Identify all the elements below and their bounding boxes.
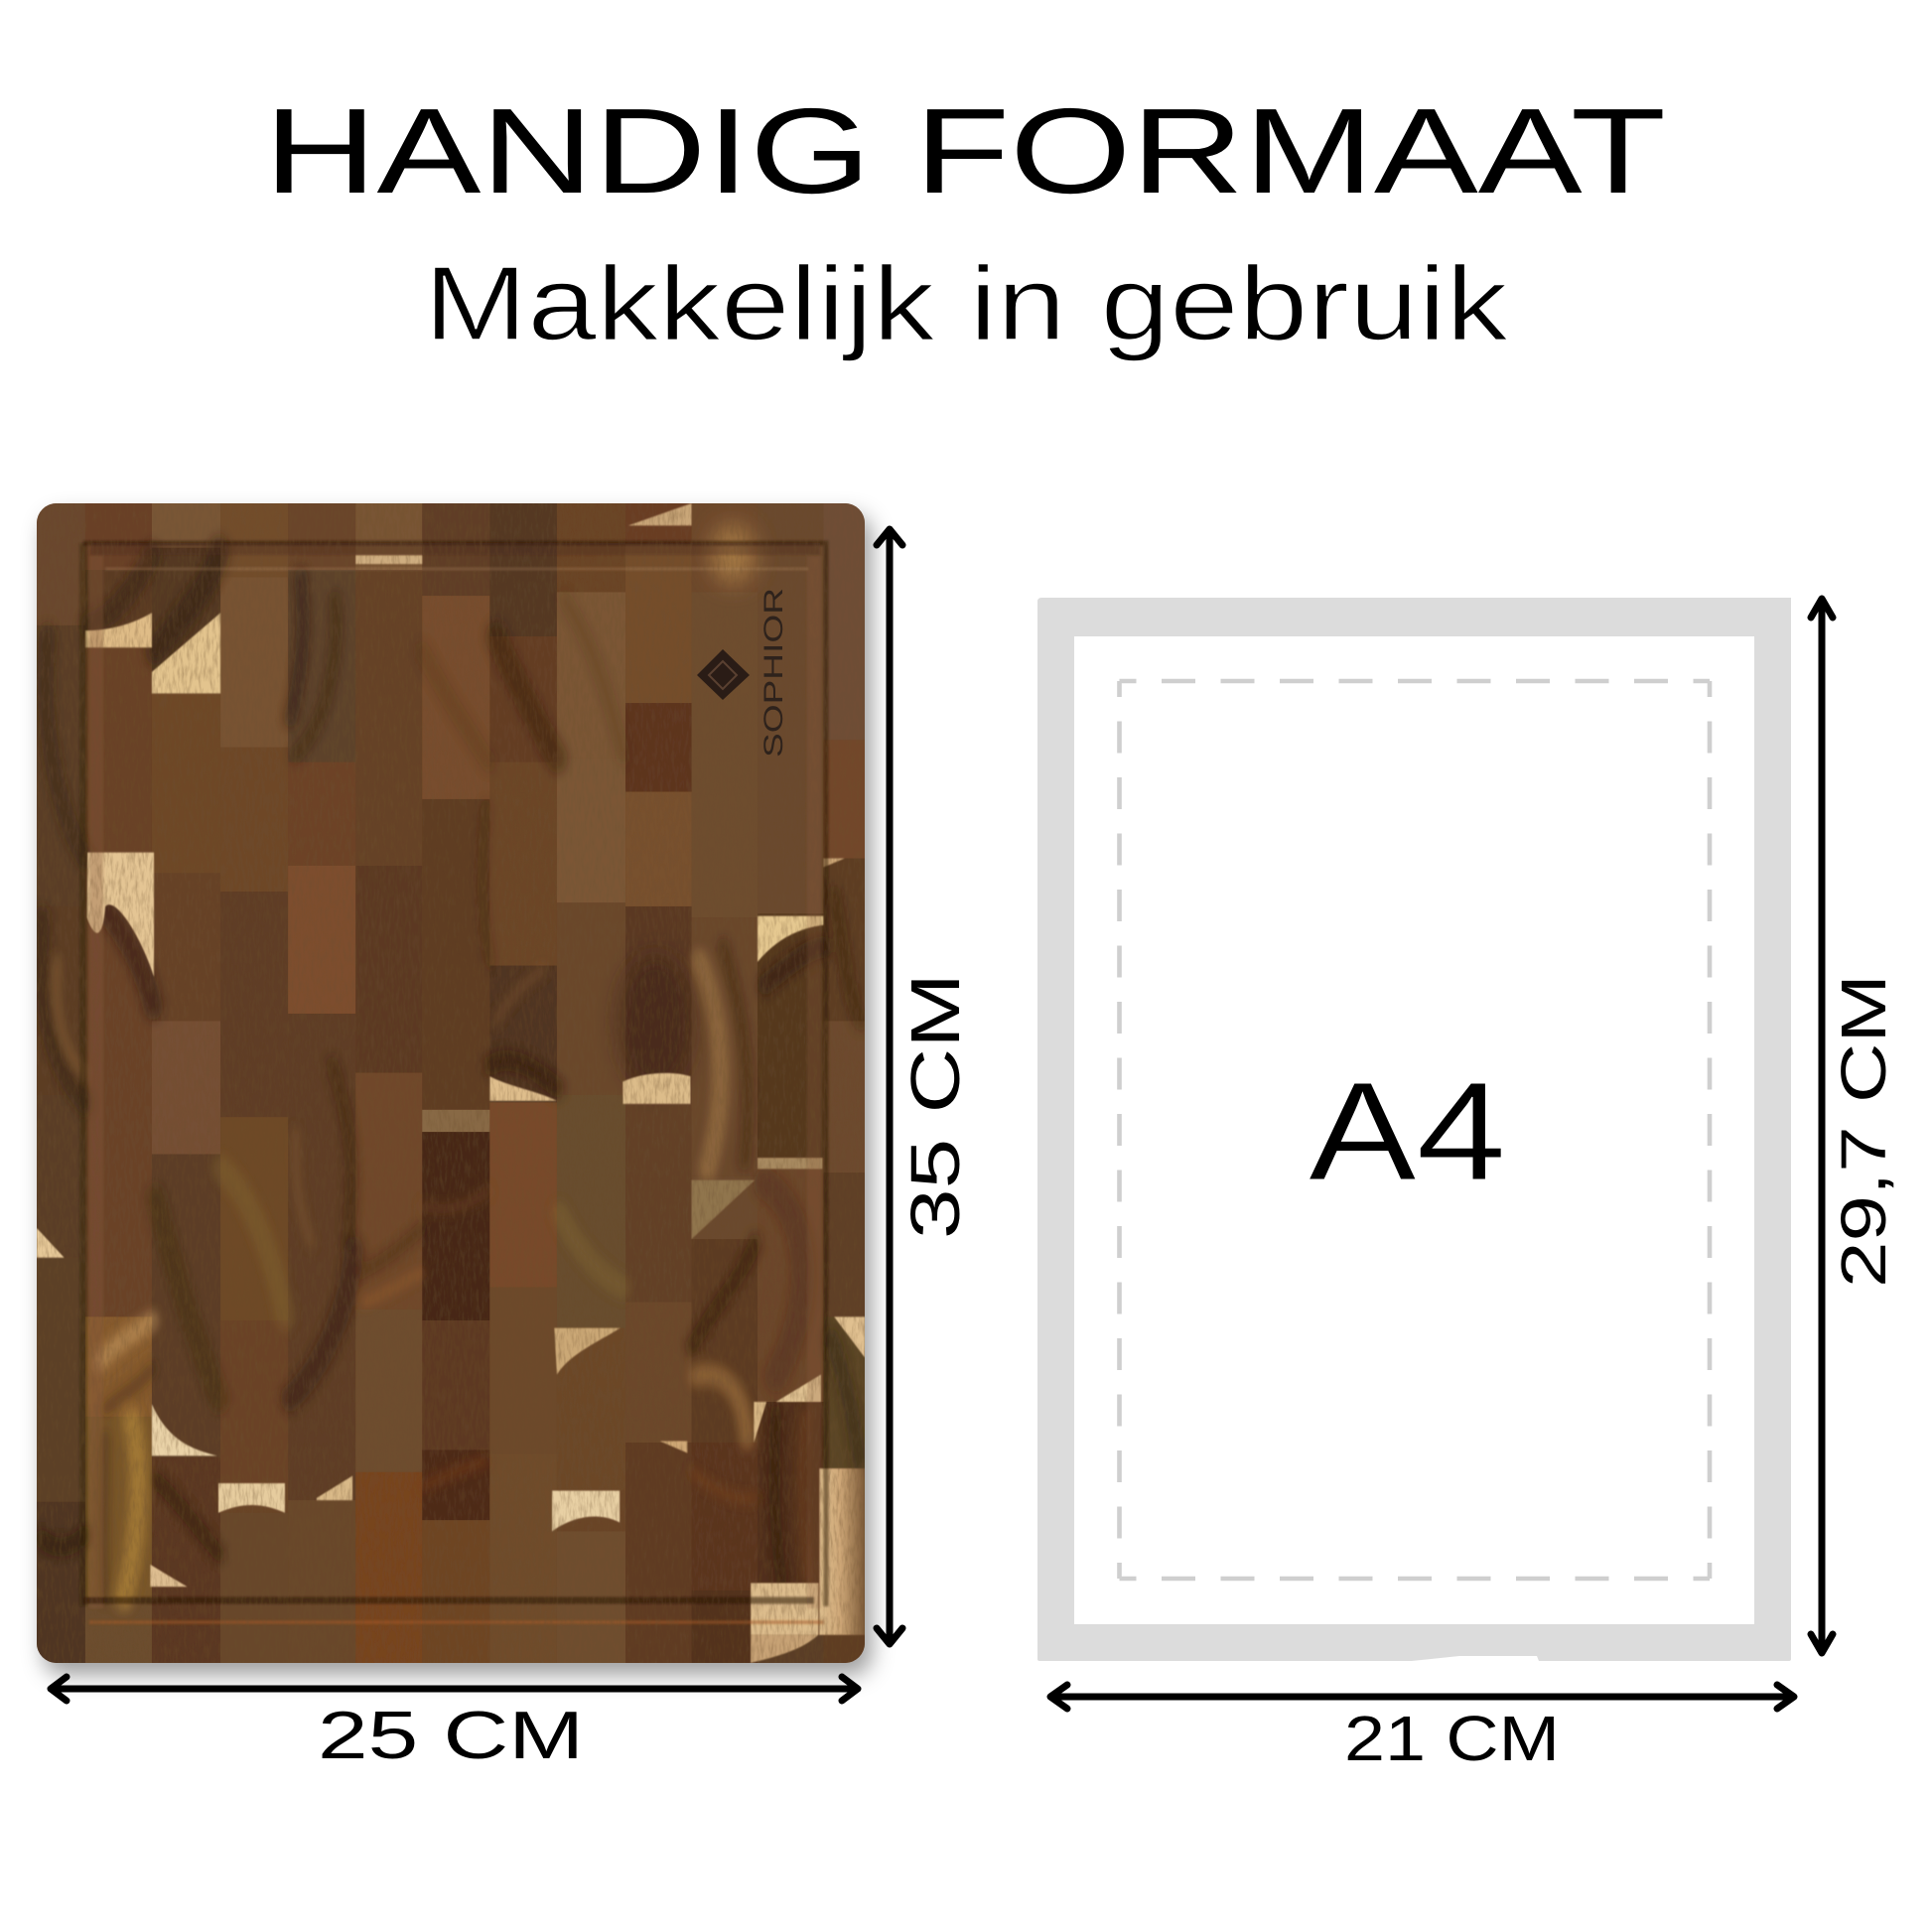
arrow: A4 height — [1811, 599, 1833, 1653]
panel: cutting board — [37, 503, 865, 1663]
label: 25 CM: 25 CM — [318, 1698, 584, 1773]
wood grain arcs — [41, 551, 861, 1597]
warm tint — [45, 542, 828, 1603]
panel: A4 sheet — [1037, 598, 1791, 1661]
wood surface — [37, 503, 865, 1663]
dashed inner outline — [1120, 681, 1710, 1579]
arrow: A4 width — [1050, 1685, 1794, 1709]
sheet frame — [1037, 598, 1791, 1661]
logo: SOPHIOR mark: SOPHIOR — [759, 588, 788, 758]
label: 21 CM: 21 CM — [1344, 1703, 1560, 1774]
light end-grain patches — [37, 503, 865, 1663]
wood blocks — [37, 503, 865, 1663]
subtitle: Makkelijk in gebruik — [424, 245, 1509, 362]
golden glow at corner — [711, 524, 755, 584]
label: 35 CM: 35 CM — [897, 973, 974, 1239]
dark knot — [618, 953, 693, 1092]
wood texture — [37, 503, 865, 1663]
label: 29,7 CM: 29,7 CM — [1828, 974, 1899, 1288]
label: A4: A4 — [1309, 1052, 1506, 1209]
juice groove — [83, 543, 826, 1622]
title: HANDIG FORMAAT — [264, 83, 1666, 218]
arrow: board height — [877, 529, 902, 1644]
logo: SOPHIOR mark — [697, 588, 788, 758]
arrow: board width — [51, 1677, 858, 1701]
